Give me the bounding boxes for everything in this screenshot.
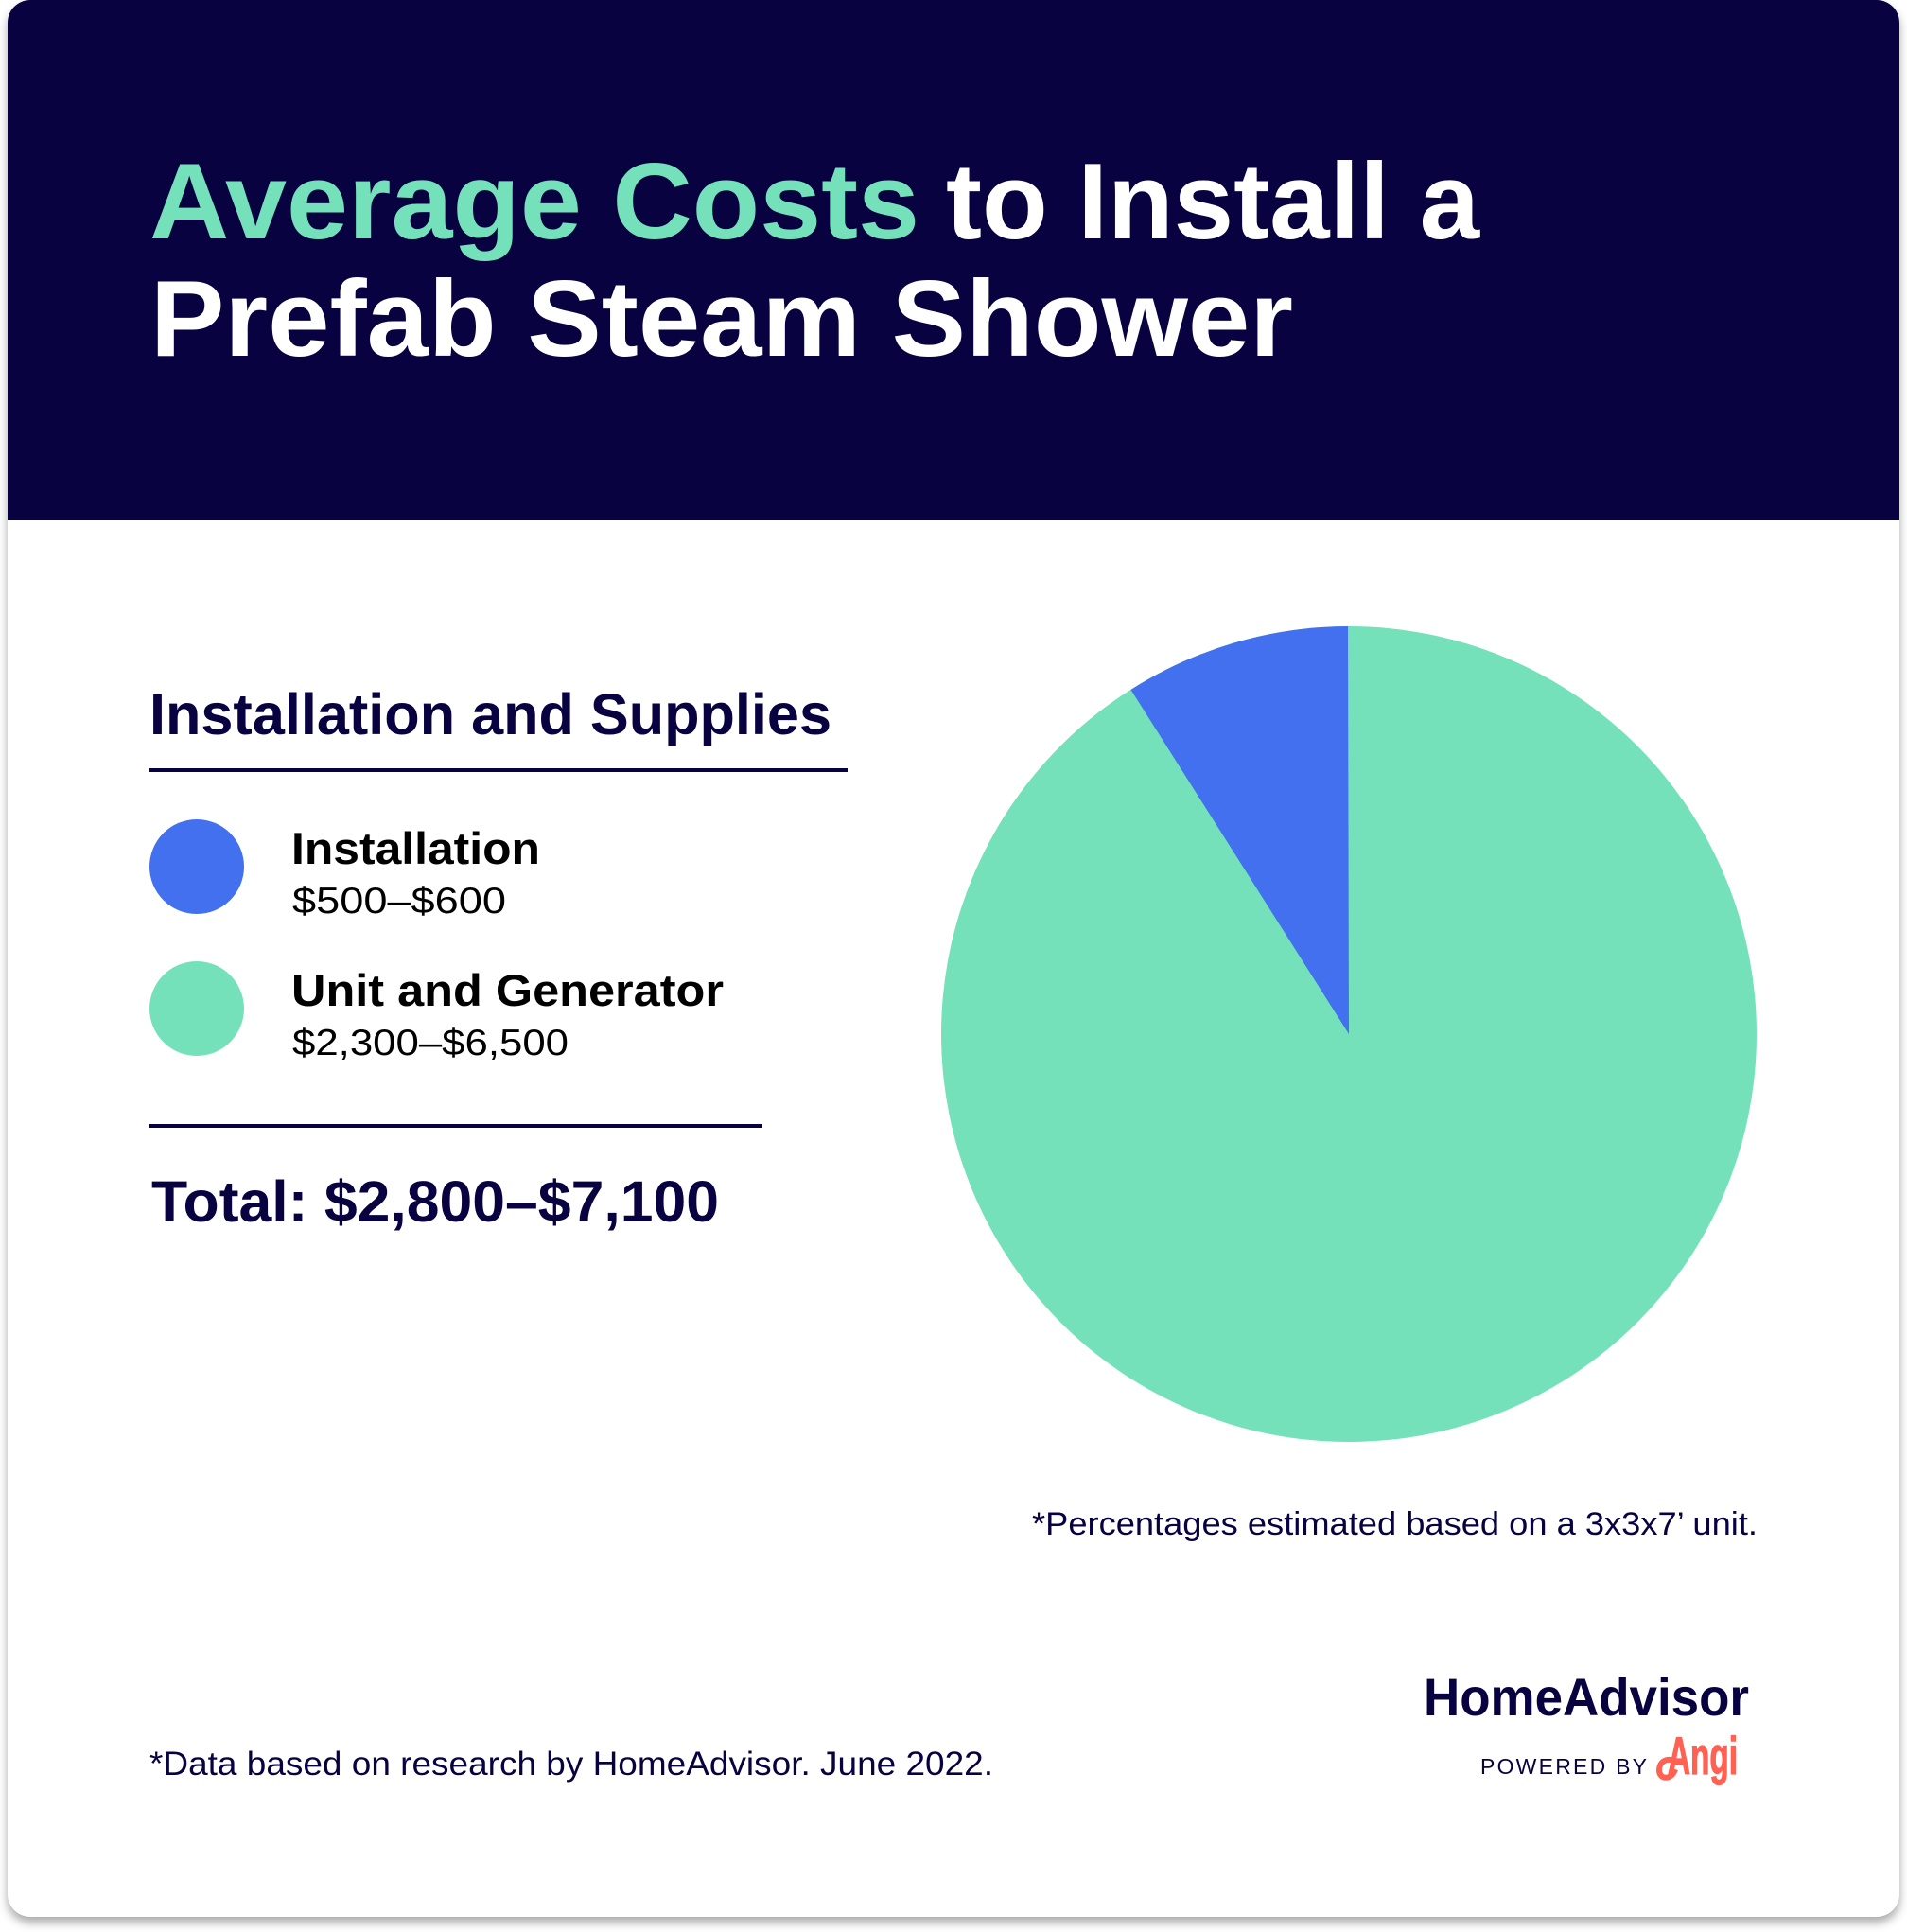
source note: *Data based on research by HomeAdvisor. June 2022. [149, 1746, 993, 1783]
logo: HomeAdvisor powered by Angi [1424, 1667, 1749, 1785]
total: Total: $2,800–$7,100 [151, 1169, 719, 1234]
legend item: installation: Installation [291, 823, 540, 873]
title: to Install a [946, 142, 1481, 262]
icon: Angi swash [1659, 1760, 1676, 1778]
chart footnote: *Percentages estimated based on a 3x3x7’ unit. [1032, 1506, 1758, 1542]
panel: header [8, 0, 1899, 520]
title [149, 142, 1481, 379]
legend item: unit and generator: Unit and Generator [291, 965, 724, 1015]
panel: legend [149, 682, 848, 1234]
logo: HomeAdvisor powered by Angi: POWERED BY [1480, 1754, 1647, 1779]
header background [8, 0, 1899, 520]
legend item: unit and generator [149, 961, 724, 1063]
title: Prefab Steam Shower [150, 259, 1293, 379]
legend item: unit and generator: $2,300–$6,500 [292, 1023, 569, 1063]
pie chart [941, 626, 1757, 1442]
title: Average Costs [149, 142, 919, 262]
logo: HomeAdvisor powered by Angi: HomeAdvisor [1424, 1667, 1749, 1727]
Angi wordmark: Angi [1668, 1726, 1738, 1785]
legend heading: Installation and Supplies [149, 682, 831, 746]
legend item: installation [149, 819, 540, 922]
legend item: installation: $500–$600 [292, 881, 506, 922]
